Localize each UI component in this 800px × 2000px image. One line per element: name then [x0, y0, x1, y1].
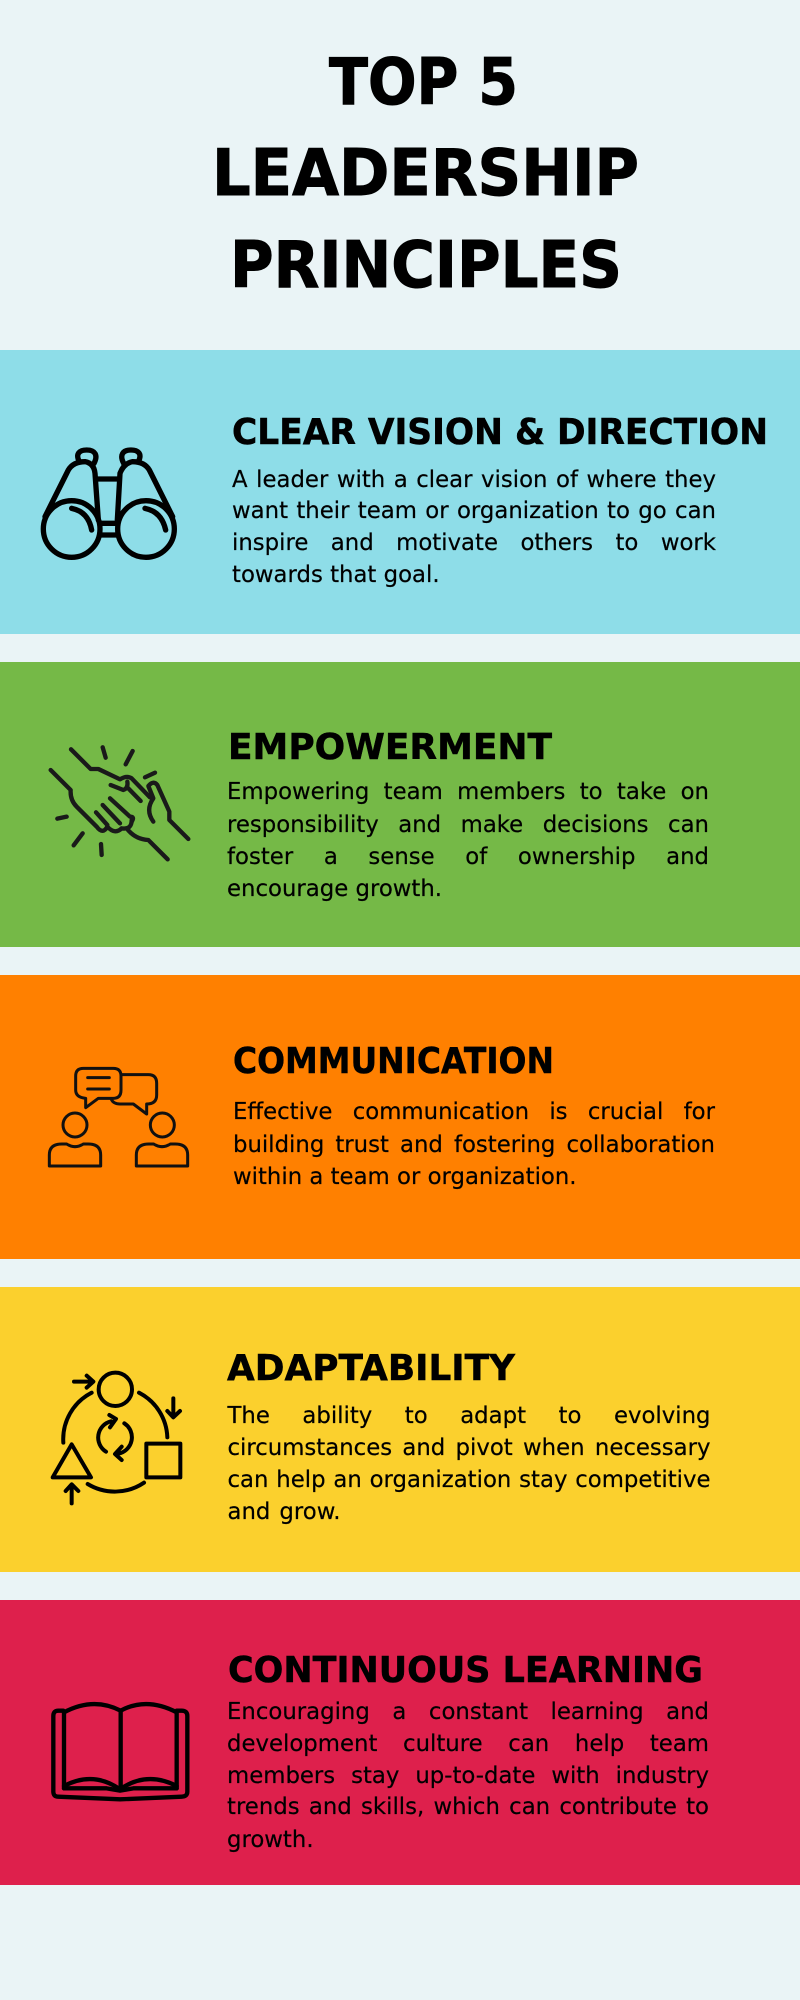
text block: empowerment description — [227, 778, 709, 902]
text block: adaptability description — [227, 1402, 710, 1524]
text block: clear vision description — [232, 466, 716, 588]
heading: adaptability: ADAPTABILITY — [227, 1348, 516, 1389]
title: TOP 5 — [329, 46, 518, 120]
text block: clear vision description: A leader with a clear vision of where they — [232, 466, 716, 492]
text block: continuous learning description: development culture can help team — [227, 1730, 709, 1756]
title: LEADERSHIP — [212, 137, 639, 211]
text block: continuous learning description: members stay up-to-date with industry — [227, 1762, 709, 1788]
panel: continuous learning — [0, 1600, 800, 1885]
text block: communication description: Effective communication is crucial for — [233, 1098, 715, 1124]
text block: continuous learning description — [227, 1698, 709, 1852]
panel: empowerment — [0, 662, 800, 947]
title: PRINCIPLES — [230, 229, 622, 303]
heading: empowerment: EMPOWERMENT — [228, 727, 552, 768]
text block: clear vision description: towards that goal. — [232, 562, 440, 588]
icon: binoculars — [40, 447, 177, 560]
panel: communication — [0, 975, 800, 1259]
text block: communication description: building trust and fostering collaboration — [233, 1132, 715, 1158]
title — [212, 46, 639, 303]
text block: clear vision description: inspire and motivate others to work — [232, 530, 716, 556]
text block: adaptability description: and grow. — [228, 1498, 340, 1524]
icon: open book — [51, 1702, 190, 1802]
heading: continuous learning: CONTINUOUS LEARNING — [228, 1650, 703, 1691]
text block: continuous learning description: growth. — [227, 1826, 314, 1852]
text block: empowerment description: responsibility and make decisions can — [227, 812, 709, 838]
heading: clear vision and direction: CLEAR VISION & DIRECTION — [232, 412, 768, 453]
text block: communication description: within a team or organization. — [233, 1164, 577, 1190]
text block: continuous learning description: trends and skills, which can contribute to — [227, 1794, 709, 1820]
text block: empowerment description: Empowering team members to take on — [227, 778, 709, 804]
heading: communication: COMMUNICATION — [233, 1041, 554, 1082]
panel: clear vision and direction — [0, 350, 800, 634]
text block: communication description — [233, 1098, 716, 1190]
text block: adaptability description: can help an organization stay competitive — [228, 1466, 710, 1492]
panel: adaptability — [0, 1287, 800, 1572]
text block: clear vision description: want their team or organization to go can — [232, 498, 716, 524]
icon: two people talking — [48, 1066, 190, 1168]
text block: continuous learning description: Encouraging a constant learning and — [227, 1698, 709, 1724]
icon: shapes cycle — [50, 1370, 182, 1506]
text block: empowerment description: encourage growth. — [227, 876, 442, 902]
text block: adaptability description: circumstances and pivot when necessary — [228, 1434, 710, 1460]
text block: empowerment description: foster a sense of ownership and — [227, 844, 709, 870]
text block: adaptability description: The ability to adapt to evolving — [228, 1402, 710, 1428]
icon: helping hands — [48, 745, 190, 862]
